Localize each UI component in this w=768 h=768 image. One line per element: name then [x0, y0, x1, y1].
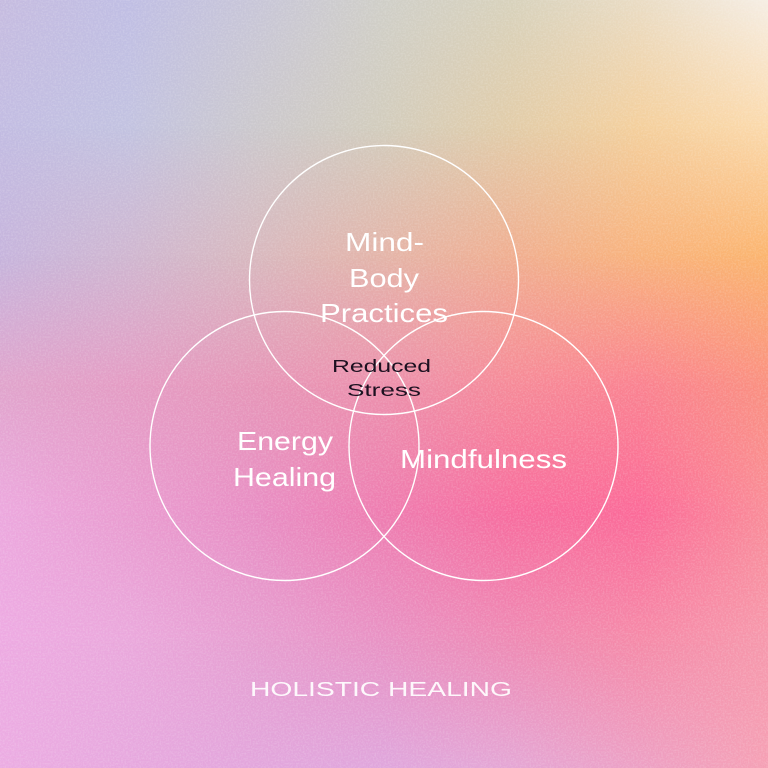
label: mind-body practices: Practices [320, 298, 448, 328]
label: mind-body practices: Mind- [345, 227, 424, 257]
label: mind-body practices [320, 227, 448, 328]
label: energy healing [233, 426, 336, 492]
circle: energy healing [150, 312, 419, 580]
label: mindfulness: Mindfulness [400, 444, 567, 474]
label: reduced stress: Reduced [332, 356, 431, 376]
label: reduced stress: Stress [347, 380, 421, 400]
label: energy healing: Energy [237, 426, 333, 456]
label: reduced stress [332, 356, 431, 400]
label: mind-body practices: Body [349, 263, 419, 293]
title: HOLISTIC HEALING [250, 679, 512, 701]
label: energy healing: Healing [233, 462, 336, 492]
circle: mindfulness [349, 312, 618, 580]
circle: mind-body practices [250, 146, 518, 414]
